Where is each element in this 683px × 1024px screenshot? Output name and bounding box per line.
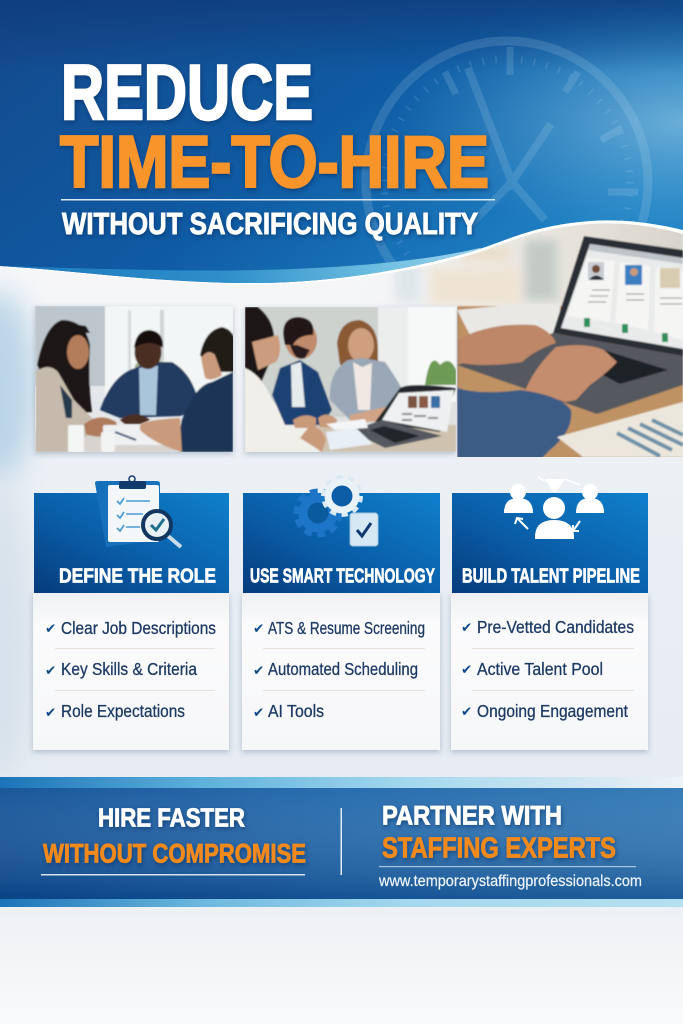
list: pipeline items: ✔ — [461, 620, 472, 636]
callout: hire faster: WITHOUT COMPROMISE — [43, 838, 306, 868]
photo: team reviewing candidates on laptop — [245, 307, 456, 452]
list: pipeline items: ✔ — [461, 704, 472, 720]
list: pipeline items — [461, 617, 634, 721]
callout: partner with staffing experts — [378, 800, 642, 890]
card: use smart technology — [242, 478, 440, 750]
list: pipeline items: Active Talent Pool — [477, 659, 603, 679]
clock watermark — [362, 36, 652, 262]
list: technology items: ✔ — [253, 663, 264, 679]
card: define the role — [33, 476, 229, 750]
heading: use smart technology: USE SMART TECHNOLOGY — [250, 566, 435, 588]
photo: two women and a man at table — [35, 306, 235, 452]
list: technology items: ATS & Resume Screening — [268, 618, 425, 638]
callout: partner with staffing experts: PARTNER WITH — [382, 800, 562, 830]
wave accent band — [0, 248, 500, 284]
list: technology items — [253, 618, 425, 721]
list: define the role items: ✔ — [45, 663, 56, 679]
list: technology items: AI Tools — [268, 701, 324, 721]
card: build talent pipeline — [451, 477, 648, 750]
list: define the role items — [45, 618, 216, 721]
list: technology items: ✔ — [253, 621, 264, 637]
list: define the role items: Clear Job Descriptions — [61, 618, 216, 638]
callout: hire faster — [41, 802, 306, 876]
heading: define the role: DEFINE THE ROLE — [59, 566, 216, 588]
list: pipeline items: ✔ — [461, 662, 472, 678]
title rule — [61, 199, 495, 200]
header banner — [0, 0, 683, 284]
footer banner — [0, 777, 683, 907]
callout: partner with staffing experts: STAFFING EXPERTS — [382, 832, 616, 864]
title: time-to-hire: TIME-TO-HIRE — [60, 122, 489, 203]
title: reduce: REDUCE — [61, 48, 313, 136]
list: define the role items: Key Skills & Criteria — [61, 659, 197, 679]
icon: talent network — [504, 477, 604, 539]
list: define the role items: ✔ — [45, 705, 56, 721]
photo: hands typing on laptop — [392, 223, 683, 457]
callout: partner with staffing experts: www.temporarystaffingprofessionals.com — [378, 873, 642, 890]
subtitle: WITHOUT SACRIFICING QUALITY — [62, 206, 478, 241]
list: pipeline items: Ongoing Engagement — [477, 701, 628, 721]
list: define the role items: Role Expectations — [61, 701, 185, 721]
callout: hire faster: HIRE FASTER — [98, 802, 245, 832]
list: pipeline items: Pre-Vetted Candidates — [477, 617, 634, 637]
icon: gears and tablet — [297, 478, 378, 546]
icon: clipboard with magnifier — [95, 476, 181, 547]
list: define the role items: ✔ — [45, 621, 56, 637]
list: technology items: ✔ — [253, 705, 264, 721]
list: technology items: Automated Scheduling — [268, 659, 418, 679]
